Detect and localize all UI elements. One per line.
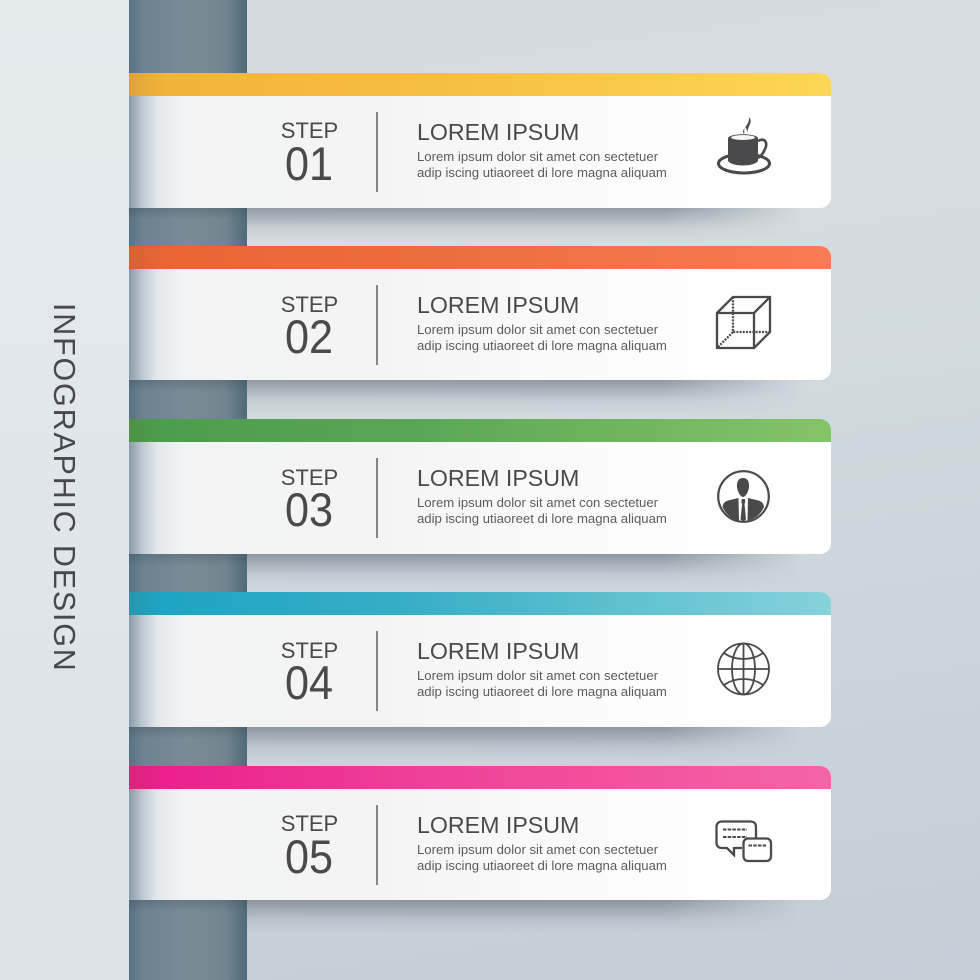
heading: LOREM IPSUM	[417, 812, 579, 838]
card shadow 1	[247, 208, 786, 234]
fold shading	[129, 442, 183, 554]
step label: STEP	[281, 118, 338, 143]
body text	[417, 322, 667, 353]
step label: STEP	[281, 292, 338, 317]
bar fold shading	[129, 592, 163, 615]
vertical title: INFOGRAPHIC DESIGN	[47, 303, 81, 673]
bar fold shading	[129, 73, 163, 96]
column shadow 2	[129, 380, 247, 392]
body text: adip iscing utiaoreet di lore magna aliquam	[417, 684, 667, 699]
step label: STEP	[281, 811, 338, 836]
icon: globe	[717, 642, 770, 696]
body text: Lorem ipsum dolor sit amet con sectetuer	[417, 668, 658, 682]
step number: 01	[285, 137, 333, 190]
divider	[376, 805, 378, 885]
card shadow 5	[247, 900, 784, 925]
card shadow 3	[247, 554, 785, 580]
divider	[376, 112, 378, 192]
card body	[129, 442, 831, 554]
heading: LOREM IPSUM	[417, 119, 579, 145]
step number: 02	[285, 310, 333, 363]
card body	[129, 789, 831, 901]
colour bar: yellow	[129, 73, 831, 96]
fold shading	[129, 615, 183, 727]
body text: adip iscing utiaoreet di lore magna aliquam	[417, 511, 667, 526]
colour bar: blue	[129, 592, 831, 615]
body text: Lorem ipsum dolor sit amet con sectetuer	[417, 494, 658, 510]
colour bar: orange	[129, 246, 831, 269]
step label: STEP	[281, 638, 338, 663]
bar fold shading	[129, 766, 163, 789]
icon: businessman	[717, 470, 770, 523]
colour bar: green	[129, 419, 831, 442]
body text: Lorem ipsum dolor sit amet con sectetuer	[417, 842, 658, 856]
heading: LOREM IPSUM	[417, 465, 579, 491]
heading: LOREM IPSUM	[417, 292, 579, 318]
fold shading	[129, 269, 183, 381]
divider	[376, 631, 378, 711]
divider	[376, 458, 378, 538]
column shadow 5	[129, 900, 247, 912]
panel: step 05	[129, 766, 831, 900]
step label: STEP	[281, 465, 338, 490]
icon: chat bubbles	[715, 820, 772, 862]
body text: adip iscing utiaoreet di lore magna aliquam	[417, 165, 667, 180]
body text: Lorem ipsum dolor sit amet con sectetuer	[417, 322, 658, 336]
icon: coffee cup	[717, 117, 771, 174]
body text: Lorem ipsum dolor sit amet con sectetuer	[417, 148, 658, 164]
panel: step 03	[129, 419, 831, 554]
panel: step 04	[129, 592, 831, 727]
card shadow 2	[247, 380, 785, 406]
column shadow 1	[129, 208, 247, 220]
fold shading	[129, 96, 183, 208]
heading: LOREM IPSUM	[417, 638, 579, 664]
panel: step 02	[129, 246, 831, 380]
background left strip	[0, 0, 129, 980]
body text: adip iscing utiaoreet di lore magna aliquam	[417, 338, 667, 353]
card shadow 4	[247, 727, 784, 752]
step number: 04	[285, 656, 333, 709]
bar fold shading	[129, 246, 163, 269]
dark vertical column	[129, 0, 247, 980]
column shadow 3	[129, 554, 247, 566]
colour bar: pink	[129, 766, 831, 789]
card body	[129, 615, 831, 727]
card body	[129, 269, 831, 381]
body text	[417, 842, 667, 873]
body text	[417, 668, 667, 699]
body text	[417, 494, 667, 526]
icon: wireframe cube	[716, 296, 772, 350]
body text	[417, 148, 667, 180]
divider	[376, 285, 378, 365]
body text: adip iscing utiaoreet di lore magna aliquam	[417, 858, 667, 873]
fold shading	[129, 789, 183, 901]
step number: 05	[285, 830, 333, 883]
step number: 03	[285, 483, 333, 536]
panel: step 01	[129, 73, 831, 208]
column shadow 4	[129, 727, 247, 739]
card body	[129, 96, 831, 208]
bar fold shading	[129, 419, 163, 442]
